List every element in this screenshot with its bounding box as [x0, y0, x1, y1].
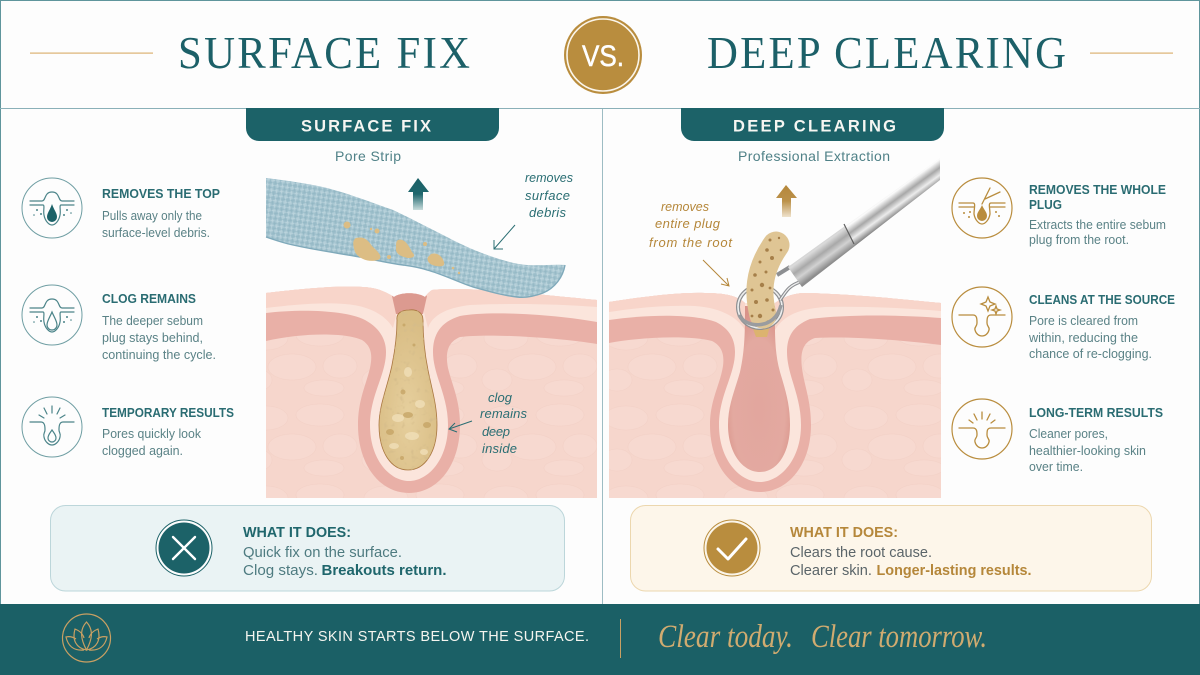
footer band	[0, 604, 1200, 675]
illustration: cleared pore with extraction tool	[609, 158, 941, 498]
text: removes the top: Pulls away only the	[102, 209, 202, 223]
panel: deep clearing header: Professional Extraction	[738, 148, 890, 164]
text: removes the whole plug: Extracts the entire sebum	[1029, 218, 1166, 232]
panel: surface fix header: SURFACE FIX	[301, 118, 431, 136]
icon: temporary results	[22, 397, 82, 457]
panel: surface fix header	[246, 108, 499, 164]
icon: check	[704, 520, 760, 576]
panel: what surface fix does: Quick fix on the surface.	[243, 544, 402, 561]
extracted sebum plug	[750, 237, 782, 324]
skin cross-section	[266, 280, 597, 498]
callout: clog remains deep inside: deep	[482, 424, 510, 439]
panel: what deep clearing does	[630, 506, 1152, 591]
callout: clog remains deep inside: inside	[482, 441, 517, 456]
text: cleans at the source	[1028, 292, 1175, 361]
script slogan: Clear today.	[658, 619, 793, 655]
callout: removes entire plug: from the root	[649, 235, 733, 250]
sebum clog	[379, 310, 437, 470]
tagline: HEALTHY SKIN STARTS BELOW THE SURFACE.	[245, 629, 589, 645]
icon: cleans at the source	[952, 287, 1012, 347]
text: temporary results: clogged again.	[102, 444, 183, 458]
debris on strip	[344, 222, 460, 274]
text: removes the whole plug: PLUG	[1029, 197, 1062, 212]
panel: what surface fix does: Breakouts return.	[322, 562, 446, 579]
text: clog remains: plug stays behind,	[102, 331, 203, 345]
text: removes the top: surface-level debris.	[102, 226, 210, 240]
icon: long-term results	[952, 399, 1012, 459]
text: temporary results	[102, 405, 234, 458]
emptied pore	[728, 306, 790, 472]
extraction tool	[738, 158, 940, 328]
callout: removes surface debris: removes	[525, 170, 573, 185]
panel: deep clearing header: DEEP CLEARING	[733, 118, 896, 136]
arrow: plug lifts up	[776, 185, 797, 217]
text: removes the top	[102, 186, 220, 240]
pore strip	[266, 178, 565, 297]
text: removes the whole plug	[1029, 182, 1166, 247]
text: removes the whole plug: plug from the root.	[1029, 233, 1129, 247]
title: deep clearing: DEEP CLEARING	[707, 27, 1066, 78]
text: long-term results	[1029, 405, 1163, 474]
callout: removes surface debris	[494, 170, 573, 249]
text: cleans at the source: CLEANS AT THE SOURCE	[1029, 292, 1175, 307]
panel: what deep clearing does: WHAT IT DOES:	[790, 525, 898, 541]
vs badge	[564, 16, 642, 94]
icon: lotus	[62, 614, 110, 662]
callout: clog remains deep inside: clog	[488, 390, 513, 405]
callout: removes surface debris: surface	[525, 188, 570, 203]
text: clog remains: The deeper sebum	[102, 314, 203, 328]
text: long-term results: LONG-TERM RESULTS	[1029, 405, 1163, 420]
text: cleans at the source: Pore is cleared from	[1029, 314, 1138, 328]
icon: removes the whole plug	[952, 178, 1012, 238]
text: clog remains: CLOG REMAINS	[102, 291, 196, 306]
callout: removes entire plug	[649, 199, 733, 286]
panel: what deep clearing does: Clearer skin.	[790, 562, 872, 579]
icon: clog remains	[22, 285, 82, 345]
panel: deep clearing header	[681, 108, 944, 164]
panel: what deep clearing does: Longer-lasting results.	[876, 562, 1032, 579]
text: temporary results: Pores quickly look	[102, 427, 202, 441]
text: long-term results: healthier-looking skin	[1029, 444, 1146, 458]
vs badge: VS.	[582, 40, 624, 73]
list: surface fix points	[22, 178, 234, 458]
list: deep clearing points	[952, 178, 1175, 474]
arrow: strip lifts up	[408, 178, 429, 210]
text: removes the whole plug: REMOVES THE WHOLE	[1029, 182, 1166, 197]
callout: clog remains deep inside	[449, 390, 528, 456]
text: cleans at the source: within, reducing the	[1028, 331, 1138, 345]
text: removes the top: REMOVES THE TOP	[102, 186, 220, 201]
text: long-term results: over time.	[1029, 460, 1083, 474]
text: clog remains	[102, 291, 216, 362]
skin cross-section	[609, 280, 941, 498]
text: temporary results: TEMPORARY RESULTS	[102, 405, 234, 420]
illustration: clogged pore with pore strip	[266, 170, 597, 498]
callout: removes entire plug: removes	[661, 199, 709, 214]
icon: cross	[156, 520, 212, 576]
panel: what deep clearing does: Clears the root cause.	[790, 544, 932, 561]
script slogan	[658, 619, 987, 655]
icon: removes the top	[22, 178, 82, 238]
panel: what surface fix does: WHAT IT DOES:	[243, 525, 351, 541]
script slogan: Clear tomorrow.	[811, 619, 987, 655]
tool loop front	[739, 305, 781, 325]
text: long-term results: Cleaner pores,	[1029, 427, 1108, 441]
text: clog remains: continuing the cycle.	[102, 348, 216, 362]
header	[30, 16, 1173, 94]
text: cleans at the source: chance of re-clogging.	[1029, 347, 1152, 361]
panel: what surface fix does	[50, 506, 564, 591]
callout: clog remains deep inside: remains	[480, 406, 528, 421]
title: surface fix: SURFACE FIX	[178, 27, 470, 78]
panel: surface fix header: Pore Strip	[335, 148, 401, 164]
callout: removes entire plug: entire plug	[655, 216, 721, 231]
callout: removes surface debris: debris	[529, 205, 566, 220]
panel: what surface fix does: Clog stays.	[243, 562, 318, 579]
